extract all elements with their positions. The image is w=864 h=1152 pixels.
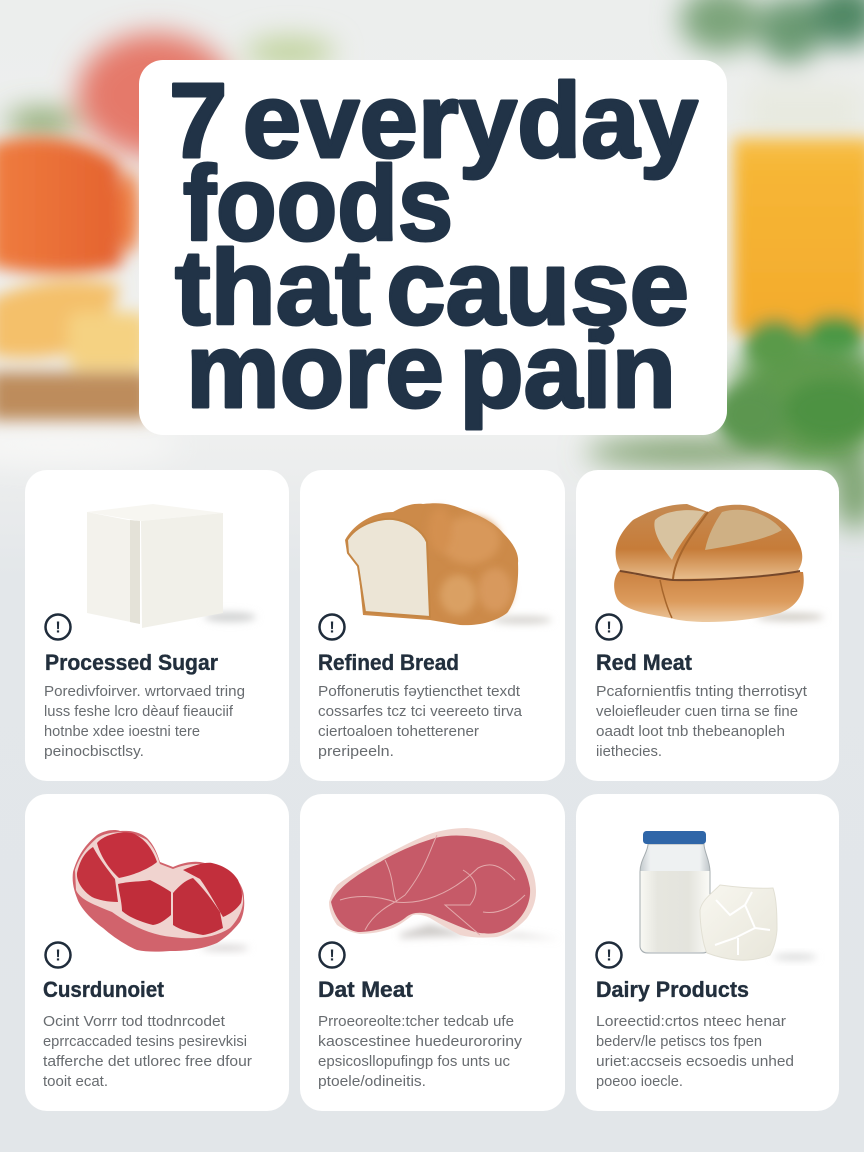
card: Red Meat [576,470,839,781]
description [318,1014,523,1090]
warning icon: ! [55,948,61,964]
title text: foods [183,145,453,263]
title text: more pain [186,312,676,430]
food image: sugar cube [87,504,256,628]
description: Ocint Vorrr tod ttodnrcodet [43,1014,225,1030]
card: Processed Sugar [25,470,289,781]
description: bederv/le petiscs tos fpen [596,1034,762,1050]
description [596,684,807,760]
description: Prroeoreolte:tcher tedcab ufe [318,1014,514,1030]
card: Cusrdunoiet [25,794,289,1111]
warning icon [46,614,70,640]
food image: milk jar and yogurt [640,831,817,960]
description: Poredivfoirver. wrtorvaed tring [44,684,245,700]
description: veloiefleuder cuen tirna se fine [596,704,798,720]
food image: bread bun [614,504,824,622]
description: cossarfes tcz tci veereeto tirva [318,704,523,720]
description: Loreectid:crtos nteec henar [596,1014,786,1030]
description: uriet:accseis ecsoedis unhed [596,1054,794,1070]
title panel [139,60,727,435]
description: oaadt loot tnb thebeanopleh [596,724,785,740]
warning icon: ! [329,620,335,636]
food image: meat cut [329,828,560,939]
warning icon: ! [606,948,612,964]
warning icon [46,942,70,968]
title text [169,62,698,430]
description [44,684,245,760]
heading: Dairy Products [596,977,749,1002]
heading: Red Meat [596,650,693,675]
description [318,684,523,760]
card: Refined Bread [300,470,565,781]
warning icon: ! [329,948,335,964]
warning icon: ! [55,620,61,636]
description: epsicosllopufingp fos unts uc [318,1054,510,1070]
description: hotnbe xdee ioestni tere [44,724,200,740]
heading: Cusrdunoiet [43,977,165,1002]
description: preripeeln. [318,744,394,760]
warning icon: ! [606,620,612,636]
warning icon [596,614,622,640]
description: tooit ecat. [43,1074,108,1090]
description [596,1014,794,1090]
warning icon [596,942,622,968]
description: peinocbisctlsy. [44,744,144,760]
warning icon [320,614,344,640]
card: Dairy Products [576,794,839,1111]
heading: Processed Sugar [45,650,218,675]
description: iiethecies. [596,744,662,760]
description: eprrcaccaded tesins pesirevkisi [43,1034,247,1050]
description: poeoo ioecle. [596,1074,683,1090]
description: ptoele/odineitis. [318,1074,426,1090]
description: ciertoaloen tohetterener [318,724,479,740]
description [43,1014,252,1090]
heading: Refined Bread [318,650,459,675]
description: kaoscestinee huedeurororiny [318,1034,523,1050]
description: luss feshe lcro dèauf fieauciif [44,704,234,720]
description: Pcafornientfis tnting therrotisyt [596,684,807,700]
heading: Dat Meat [318,977,414,1002]
description: tafferche det utlorec free dfour [43,1054,252,1070]
title text: that cause [175,229,689,347]
food image: red steak [73,830,249,952]
warning icon [320,942,344,968]
food image: bread loaf [345,503,552,625]
card: Dat Meat [300,794,565,1111]
title text: 7 everyday [169,62,698,180]
description: Poffonerutis fəytiencthet texdt [318,684,520,700]
